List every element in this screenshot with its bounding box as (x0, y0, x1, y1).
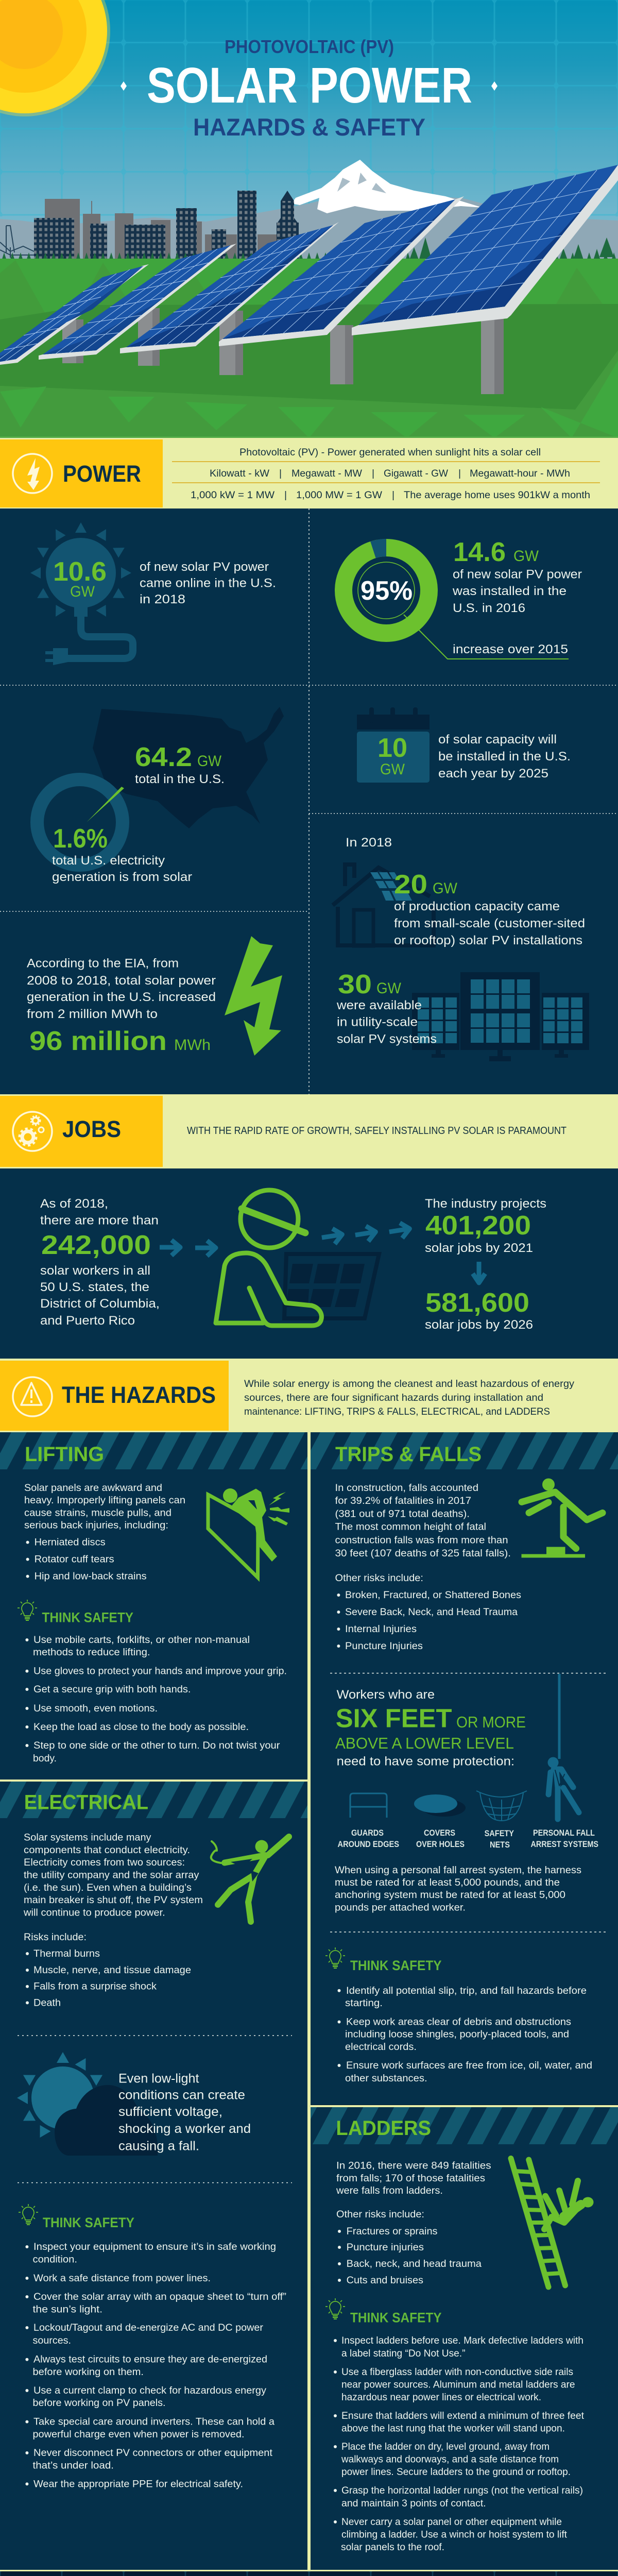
think safety: lifting: Step to one side or the other to turn. Do not twist your (33, 1740, 280, 1751)
stat: 10.6 GW (30, 522, 276, 665)
stat: 2018 capacity: GW (376, 980, 402, 997)
text: projected jobs: The industry projects (425, 1197, 546, 1211)
icon: sun (0, 0, 110, 116)
definition lines (172, 447, 600, 501)
text: 242,000 workers: solar workers in all (40, 1264, 150, 1278)
icon: person falling from ladder (511, 2158, 593, 2287)
definition lines: Gigawatt - GW (384, 468, 449, 479)
think safety: electrical: Inspect your equipment to ensure it’s in safe working (33, 2242, 276, 2252)
think safety: ladders (325, 2298, 585, 2553)
solar panel 4 (219, 196, 464, 346)
panel: power statistics (0, 509, 618, 1094)
definition lines: The average home uses 901kW a month (404, 489, 590, 501)
text: harness rating: When using a personal fall arrest system, the harness (335, 1865, 581, 1876)
heading: the hazards: THE HAZARDS (62, 1382, 216, 1408)
text: electrical intro: Risks include: (24, 1932, 87, 1943)
stat: 2018 capacity: In 2018 (346, 836, 392, 850)
think safety: lifting: body. (33, 1753, 57, 1764)
text: hazards intro: sources, there are four significant hazards during installation and (244, 1392, 543, 1403)
chart: 95 percent donut: 95% (360, 576, 413, 606)
stat: 96 million MWh: 2008 to 2018, total solar power (27, 974, 216, 988)
stat: 96 million MWh: MWh (174, 1037, 211, 1054)
think safety: lifting: Use gloves to protect your hands and improve your grip. (33, 1666, 287, 1677)
think safety: electrical: Take special care around inverters. These can hold a (33, 2417, 274, 2428)
think safety: electrical: Cover the solar array with an opaque sheet to “turn off” (33, 2292, 286, 2302)
think safety: ladders: a label stating “Do Not Use.” (341, 2348, 466, 2359)
text: ladder statistics: Puncture injuries (347, 2242, 424, 2253)
icon: solar panel array (412, 972, 589, 1061)
heading: ladders: LADDERS (336, 2117, 431, 2140)
labels: protection types: AROUND EDGES (338, 1839, 399, 1849)
text: lifting intro: Solar panels are awkward and (24, 1483, 162, 1494)
text: 242,000 workers: 50 U.S. states, the (40, 1280, 149, 1294)
text: ladder statistics: Cuts and bruises (347, 2275, 423, 2286)
icon: sun behind cloud (17, 2052, 158, 2156)
heading: trips and falls: TRIPS & FALLS (335, 1443, 482, 1466)
text: electrical intro: Thermal burns (33, 1948, 100, 1959)
text: 242,000 workers: As of 2018, (40, 1197, 108, 1211)
panel: footer (0, 2571, 618, 2576)
stat: 10.6 GW: in 2018 (140, 592, 185, 606)
text: electrical intro: the utility company and the solar array (24, 1870, 199, 1881)
panel: jobs statistics (0, 1168, 618, 1359)
stat: 2018 capacity: were available (336, 998, 422, 1012)
icon: lightning bolt (225, 936, 282, 1056)
text: ladder statistics: from falls; 170 of those fatalities (336, 2173, 485, 2184)
text: falls statistics: Puncture Injuries (345, 1641, 423, 1652)
definition lines: 1,000 MW = 1 GW (296, 489, 383, 501)
definition lines: | (458, 468, 461, 479)
text: ladder statistics: In 2016, there were 849 fatalities (336, 2161, 491, 2171)
text: ladder statistics (336, 2161, 491, 2286)
stat: 10 GW per year: each year by 2025 (438, 767, 548, 781)
think safety: trips and falls: electrical cords. (345, 2042, 417, 2053)
text: ladder statistics: Other risks include: (336, 2209, 424, 2220)
think safety: trips and falls: Keep work areas clear of debris and obstructions (346, 2016, 571, 2028)
panel: jobs banner (0, 1094, 618, 1168)
text: electrical intro: Falls from a surprise shock (33, 1981, 157, 1992)
text: six feet rule: need to have some protection: (337, 1755, 514, 1769)
think safety: electrical: before working on PV panels. (33, 2398, 166, 2409)
definition lines: | (284, 489, 287, 501)
definition lines: | (372, 468, 374, 479)
text: jobs tagline: WITH THE RAPID RATE OF GROWTH, SAFELY INSTALLING PV SOLAR IS PARAMOUNT (187, 1125, 566, 1137)
stat: 2018 capacity: 20 (394, 870, 427, 900)
text: lifting intro: serious back injuries, including: (24, 1520, 168, 1531)
text: 242,000 workers (40, 1197, 160, 1328)
icon: sun with plug (30, 522, 133, 665)
think safety: ladders: THINK SAFETY (350, 2310, 442, 2326)
text: lifting intro (24, 1483, 185, 1582)
definition lines: | (392, 489, 394, 501)
stat: 64.2 GW and 1.6 percent (37, 707, 284, 884)
think safety: electrical: Never disconnect PV connectors or other equipment (33, 2448, 273, 2459)
text: harness rating: pounds per attached worker. (335, 1903, 466, 1913)
text: lifting intro: heavy. Improperly lifting panels can (24, 1495, 185, 1506)
callout: low light: causing a fall. (118, 2139, 199, 2154)
text: harness rating: anchoring system must be rated for at least 5,000 (335, 1890, 565, 1901)
stat: 10 GW per year: be installed in the U.S. (438, 750, 571, 764)
text: projected jobs: solar jobs by 2021 (425, 1241, 533, 1255)
stat: 2018 capacity: solar PV systems (337, 1032, 437, 1046)
text: harness rating (335, 1865, 581, 1913)
think safety: trips and falls (325, 1947, 592, 2084)
text: lifting intro: cause strains, muscle pulls, and (24, 1507, 171, 1519)
text: electrical intro: will continue to produce power. (23, 1907, 165, 1918)
think safety: ladders: Use a fiberglass ladder with non-conductive side rails (341, 2367, 573, 2378)
stat: 2018 capacity: or rooftop) solar PV installations (394, 934, 582, 947)
think safety: trips and falls: starting. (345, 1998, 383, 2009)
stat: 2018 capacity (333, 836, 589, 1061)
think safety: electrical: Always test circuits to ensure they are de-energized (33, 2354, 267, 2365)
stat: 10.6 GW: 10.6 (53, 557, 107, 587)
icon: house with solar roof (333, 865, 434, 946)
stat: 2018 capacity: GW (433, 880, 458, 897)
text: falls statistics: Other risks include: (335, 1573, 423, 1584)
labels: protection types: NETS (490, 1840, 510, 1850)
stat: 14.6 GW donut: U.S. in 2016 (453, 601, 525, 615)
stat: 96 million MWh (27, 936, 282, 1056)
solar panel 2 (39, 244, 236, 360)
icon: cover over hole (414, 1794, 466, 1817)
text: falls statistics: The most common height of fatal (335, 1522, 486, 1533)
text: falls statistics: 30 feet (107 deaths of 325 fatal falls). (335, 1548, 511, 1559)
icon: gears (13, 1112, 52, 1151)
stat: 64.2 GW and 1.6 percent: total in the U.S. (135, 772, 225, 786)
text: projected jobs: solar jobs by 2026 (425, 1318, 533, 1332)
skyline (0, 191, 618, 270)
think safety: ladders: hazardous near power lines or electrical work. (341, 2392, 541, 2403)
panel: trips and falls (311, 1432, 618, 2105)
icon: calendar: GW (380, 761, 405, 778)
callout: low light: conditions can create (118, 2088, 245, 2102)
text: electrical intro: Electricity comes from two sources: (24, 1857, 185, 1868)
text: 242,000 workers: District of Columbia, (40, 1297, 160, 1311)
think safety: ladders: near power sources. Aluminum and metal ladders are (341, 2379, 575, 2391)
text: electrical intro: components that conduct electricity. (24, 1845, 190, 1856)
stat: 2018 capacity: from small-scale (customer-sited (394, 917, 585, 930)
text: hazards intro (244, 1378, 574, 1417)
text: six feet rule: ABOVE A LOWER LEVEL (335, 1734, 514, 1752)
icon: warning triangle (13, 1377, 52, 1416)
text: 242,000 workers: and Puerto Rico (40, 1314, 135, 1328)
solar panel 3 (120, 222, 339, 353)
text: six feet rule: SIX FEET (336, 1703, 452, 1733)
labels: protection types: COVERS (424, 1828, 455, 1838)
stat: 64.2 GW and 1.6 percent: 1.6% (53, 824, 108, 854)
mountains (0, 160, 618, 260)
text: projected jobs: 581,600 (425, 1288, 529, 1318)
think safety: electrical: the sun’s light. (33, 2304, 102, 2315)
think safety: electrical (19, 2204, 286, 2489)
text: falls statistics: Severe Back, Neck, and Head Trauma (345, 1607, 518, 1618)
arrows: growth (160, 1222, 485, 1283)
text: ladder statistics: were falls from ladders. (336, 2185, 443, 2196)
text: projected jobs: 401,200 (425, 1211, 531, 1241)
icon: person tripping (521, 1479, 603, 1558)
text: falls statistics: for 39.2% of fatalities in 2017 (335, 1496, 471, 1506)
think safety: lifting: Use smooth, even motions. (33, 1703, 158, 1714)
definition lines: 1,000 kW = 1 MW (191, 489, 275, 501)
text: falls statistics: (381 out of 971 total deaths). (335, 1509, 470, 1520)
icon: light bulb (325, 1947, 345, 1968)
stat: 64.2 GW and 1.6 percent: GW (197, 753, 222, 770)
stat: 10 GW per year (357, 707, 571, 783)
stat: 14.6 GW donut: of new solar PV power (453, 568, 582, 581)
heading: electrical: ELECTRICAL (24, 1791, 148, 1814)
think safety: ladders: Ensure that ladders will extend a minimum of three feet (341, 2411, 585, 2421)
think safety: trips and falls: Identify all potential slip, trip, and fall hazards before (346, 1986, 587, 1996)
definition lines: Megawatt-hour - MWh (470, 468, 570, 479)
icon: worker with solar panel (216, 1190, 379, 1326)
text: falls statistics: Broken, Fractured, or Shattered Bones (345, 1590, 521, 1601)
heading: power: POWER (63, 461, 141, 487)
definition lines: Photovoltaic (PV) - Power generated when sunlight hits a solar cell (239, 447, 541, 458)
icon: lightning bolt (13, 454, 52, 493)
panel: hazards banner (0, 1359, 618, 1432)
think safety: electrical: that’s under load. (33, 2461, 114, 2471)
labels: protection types: OVER HOLES (416, 1839, 465, 1849)
icon: calendar (357, 707, 430, 783)
stat: 96 million MWh: 96 million (29, 1026, 167, 1056)
think safety: lifting: THINK SAFETY (42, 1609, 133, 1625)
stat: 64.2 GW and 1.6 percent: 64.2 (135, 742, 192, 772)
panel: power banner (0, 438, 618, 509)
heading: lifting: LIFTING (25, 1443, 104, 1466)
icon: person lifting panel with back strain (208, 1488, 289, 1578)
think safety: ladders: Never carry a solar panel or other equipment while (341, 2517, 562, 2528)
text: harness rating: must be rated for at least 5,000 pounds, and the (335, 1877, 560, 1888)
callout: low light: Even low-light (118, 2071, 199, 2086)
think safety: ladders: above the last rung that the worker will stand upon. (341, 2424, 565, 2434)
labels: protection types: GUARDS (351, 1828, 384, 1838)
map: United States (93, 707, 284, 828)
icon: person being shocked (211, 1837, 289, 1922)
stat: 14.6 GW donut (344, 537, 582, 659)
think safety: trips and falls: THINK SAFETY (350, 1958, 442, 1973)
definition lines: | (279, 468, 282, 479)
text: six feet rule: Workers who are (337, 1688, 435, 1702)
stat: 10 GW per year: of solar capacity will (438, 733, 557, 747)
posts (62, 308, 504, 394)
solar panel 1 (0, 264, 149, 365)
stat: 96 million MWh: from 2 million MWh to (27, 1007, 158, 1021)
stat: 2018 capacity: of production capacity came (394, 900, 560, 913)
text: 242,000 workers: there are more than (40, 1214, 159, 1228)
think safety: lifting: Get a secure grip with both hands. (33, 1684, 191, 1695)
text: lifting intro: Herniated discs (35, 1537, 106, 1548)
think safety: lifting (18, 1600, 287, 1764)
panel: hero illustration (0, 0, 618, 438)
chart: ring with 1.6 percent wedge (37, 779, 124, 865)
text: falls statistics: In construction, falls accounted (335, 1483, 478, 1494)
definition lines: Megawatt - MW (291, 468, 363, 479)
callout: low light: sufficient voltage, (118, 2105, 222, 2119)
text: electrical intro: Muscle, nerve, and tissue damage (33, 1965, 191, 1976)
stat: 2018 capacity: in utility-scale (337, 1015, 418, 1029)
icon: guards around edges (350, 1793, 387, 1818)
text: lifting intro: Hip and low-back strains (35, 1571, 147, 1582)
stat: 14.6 GW donut: 14.6 (453, 537, 506, 567)
think safety: ladders: Place the ladder on dry, level ground, away from (341, 2442, 550, 2452)
think safety: ladders: walkways and doorways, and a safe distance from (341, 2454, 559, 2465)
text: electrical intro: (i.e. the sun). Even when a building’s (24, 1883, 192, 1893)
text: six feet rule: OR MORE (456, 1713, 526, 1731)
title: solar power: SOLAR POWER (147, 57, 472, 113)
labels: protection types: ARREST SYSTEMS (530, 1839, 598, 1849)
think safety: lifting: methods to reduce lifting. (33, 1647, 150, 1658)
think safety: electrical: powerful charge even when power is removed. (33, 2429, 244, 2440)
text: electrical intro: Solar systems include many (24, 1832, 151, 1843)
text: 242,000 workers: 242,000 (41, 1230, 151, 1260)
heading: jobs: JOBS (62, 1116, 121, 1142)
text: falls statistics: construction falls was from more than (335, 1535, 508, 1546)
ground (0, 259, 618, 438)
icon: light bulb (19, 2204, 38, 2225)
think safety: electrical: THINK SAFETY (43, 2215, 134, 2230)
icon: light bulb (18, 1600, 37, 1620)
icon: safety net (476, 1791, 527, 1821)
think safety: ladders: Grasp the horizontal ladder rungs (not the vertical rails) (341, 2485, 583, 2496)
panel: electrical (0, 1782, 307, 2570)
think safety: electrical: Wear the appropriate PPE for electrical safety. (33, 2479, 243, 2489)
panel dividers (0, 1432, 618, 2571)
text: projected jobs (425, 1197, 546, 1332)
text: lifting intro: Rotator cuff tears (35, 1554, 114, 1565)
think safety: ladders: solar panels to the roof. (341, 2542, 444, 2553)
callout: low light: shocking a worker and (118, 2122, 251, 2136)
stat: 64.2 GW and 1.6 percent: generation is from solar (52, 870, 192, 884)
think safety: ladders: and maintain 3 points of contact. (341, 2498, 486, 2509)
think safety: ladders: power lines. Secure ladders to the ground or rooftop. (341, 2467, 571, 2478)
think safety: lifting: Keep the load as close to the body as possible. (33, 1722, 249, 1733)
think safety: trips and falls: Ensure work surfaces are free from ice, oil, water, and (346, 2060, 592, 2071)
text: hazards intro: While solar energy is among the cleanest and least hazardous of energy (244, 1378, 574, 1389)
think safety: electrical: Use a current clamp to check for hazardous energy (33, 2385, 267, 2396)
text: electrical intro: Death (33, 1997, 61, 2008)
think safety: trips and falls: including loose shingles, poorly-placed tools, and (345, 2029, 569, 2040)
icon: calendar: 10 (377, 733, 407, 763)
stat: 14.6 GW donut: was installed in the (452, 584, 566, 598)
think safety: electrical: Work a safe distance from power lines. (33, 2273, 211, 2284)
think safety: ladders: Inspect ladders before use. Mark defective ladders with (341, 2335, 583, 2346)
chart: 95 percent donut (344, 548, 569, 659)
icon: light bulb (325, 2298, 345, 2319)
panel: lifting (0, 1432, 307, 1780)
text: hazards intro: maintenance: LIFTING, TRIPS & FALLS, ELECTRICAL, and LADDERS (244, 1406, 550, 1417)
stat: 96 million MWh: generation in the U.S. increased (27, 990, 216, 1004)
solar panel 5 (352, 162, 618, 335)
stat: 14.6 GW donut: increase over 2015 (453, 642, 568, 656)
think safety: electrical: sources. (33, 2335, 71, 2346)
stat: 2018 capacity: 30 (338, 970, 372, 999)
definition lines: Kilowatt - kW (210, 468, 270, 479)
think safety: trips and falls: other substances. (345, 2073, 427, 2084)
title: hazards and safety: HAZARDS & SAFETY (193, 113, 425, 141)
think safety: electrical: condition. (33, 2255, 77, 2265)
labels: protection types: SAFETY (485, 1828, 514, 1838)
text: ladder statistics: Back, neck, and head trauma (347, 2259, 482, 2269)
stat: 10.6 GW: came online in the U.S. (140, 576, 276, 590)
think safety: ladders: climbing a ladder. Use a winch or hoist system to lift (341, 2530, 568, 2540)
think safety: electrical: Lockout/Tagout and de-energize AC and DC power (33, 2323, 264, 2333)
text: ladder statistics: Fractures or sprains (347, 2226, 438, 2237)
text: electrical intro: main breaker is shut off, the PV system (24, 1895, 203, 1906)
labels: protection types: PERSONAL FALL (533, 1828, 595, 1838)
panel: ladders (311, 2107, 618, 2570)
stat: 64.2 GW and 1.6 percent: total U.S. electricity (52, 854, 165, 868)
stat: 14.6 GW donut: GW (513, 548, 539, 565)
think safety: lifting: Use mobile carts, forklifts, or other non-manual (33, 1635, 250, 1646)
labels: protection types (338, 1828, 598, 1850)
text: electrical intro (23, 1832, 203, 2008)
stat: 96 million MWh: According to the EIA, from (27, 957, 179, 971)
icon: fall arrest worker (548, 1674, 579, 1819)
text: falls statistics: Internal Injuries (345, 1624, 417, 1635)
think safety: electrical: before working on them. (33, 2367, 144, 2378)
stat: 10.6 GW: GW (70, 583, 95, 600)
title: photovoltaic: PHOTOVOLTAIC (PV) (225, 36, 394, 57)
callout: low light (17, 2052, 251, 2156)
stat: 10.6 GW: of new solar PV power (140, 560, 269, 574)
text: six feet rule (335, 1688, 526, 1769)
text: falls statistics (335, 1483, 521, 1652)
